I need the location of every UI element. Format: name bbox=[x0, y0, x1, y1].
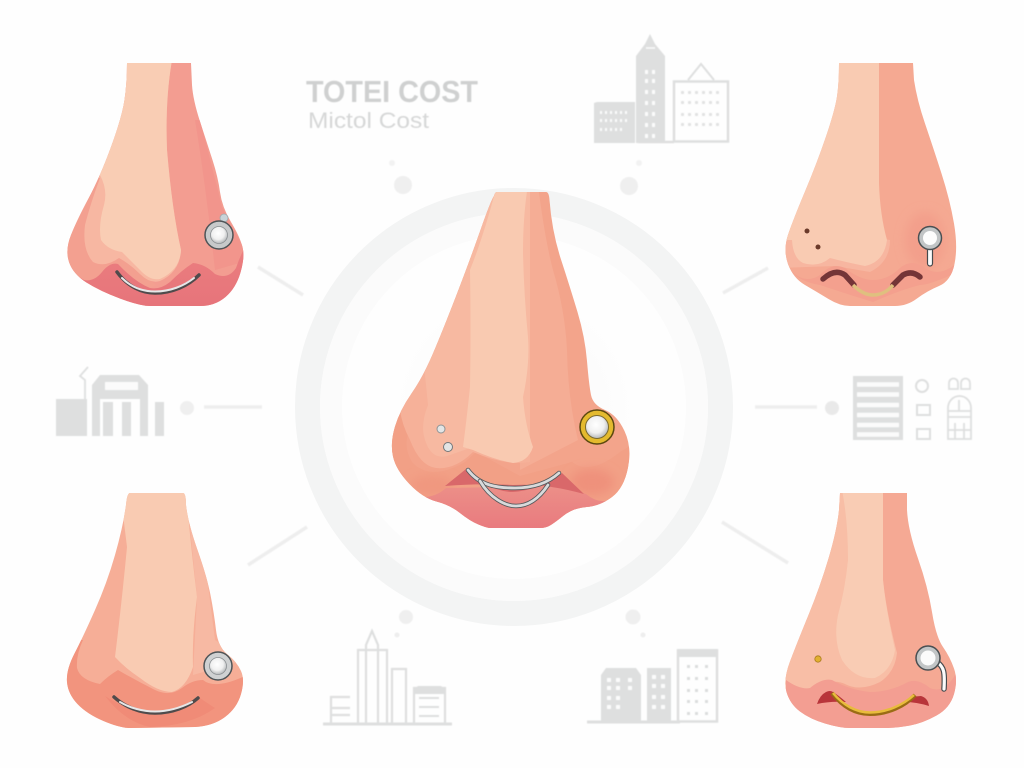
ring with stem bbox=[918, 226, 942, 266]
nostril right bbox=[905, 696, 929, 706]
ring with hook bbox=[916, 646, 944, 689]
nostril right bbox=[893, 273, 920, 285]
gold septum bbox=[853, 285, 893, 295]
nostril left bbox=[817, 691, 846, 704]
nose skin bbox=[786, 63, 956, 306]
nose skin bbox=[780, 490, 960, 730]
central ring bbox=[308, 200, 720, 614]
septum ring bbox=[468, 470, 559, 506]
gold septum bbox=[832, 693, 915, 714]
icon: left building bbox=[56, 367, 164, 436]
ring piercing bbox=[204, 652, 232, 680]
icon: city top bbox=[594, 34, 728, 143]
title: TOTEI COST bbox=[306, 74, 478, 109]
nostril left bbox=[823, 272, 854, 285]
ring piercing bbox=[205, 214, 233, 249]
nose: bottom left bbox=[60, 490, 250, 730]
nose skin bbox=[60, 490, 250, 730]
nose: top right bbox=[786, 63, 956, 306]
septum ring bbox=[114, 697, 198, 713]
icon: skyline bottom left bbox=[323, 631, 452, 724]
nose: bottom right bbox=[780, 490, 960, 730]
stud pair bbox=[804, 228, 820, 250]
icon: right buildings bbox=[853, 376, 971, 440]
icon: skyline bottom right bbox=[587, 649, 718, 722]
nose skin bbox=[60, 60, 250, 310]
connector lines and dots bbox=[180, 160, 839, 638]
gold ring piercing bbox=[580, 410, 614, 444]
nose: centre bbox=[392, 192, 630, 528]
heading bbox=[306, 74, 478, 133]
subtitle: Mictol Cost bbox=[308, 108, 429, 133]
stud pair bbox=[437, 425, 452, 452]
nose skin bbox=[392, 192, 630, 528]
gold stud bbox=[815, 656, 821, 662]
septum ring bbox=[117, 272, 199, 293]
nose: top left bbox=[60, 60, 250, 310]
